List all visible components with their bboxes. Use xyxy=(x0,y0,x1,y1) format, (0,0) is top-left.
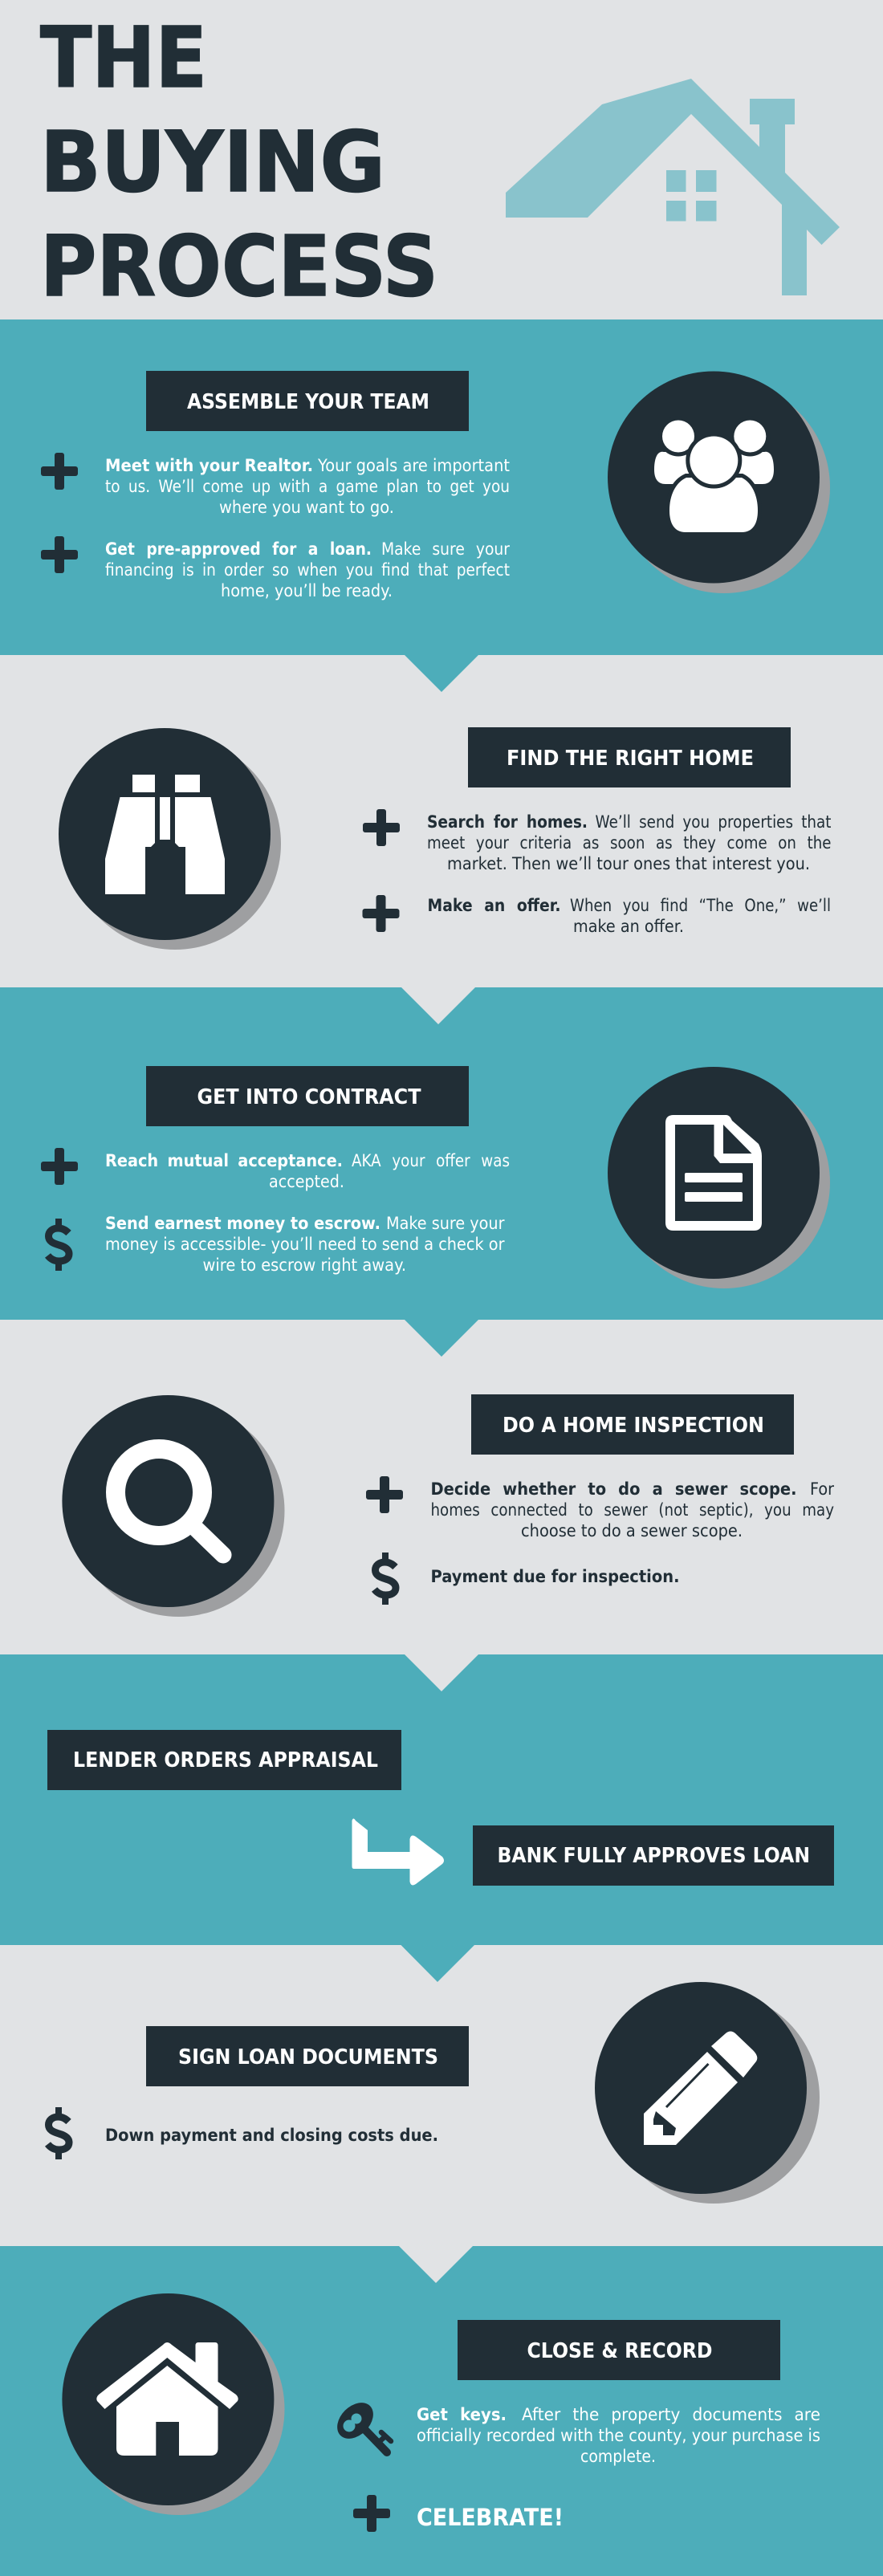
icon: dollar sign xyxy=(48,1219,69,1271)
text block: reach mutual acceptance xyxy=(105,1151,510,1191)
text block: decide on sewer scope xyxy=(430,1479,834,1540)
heading: get into contract: GET INTO CONTRACT xyxy=(197,1085,421,1109)
text block: get pre-approved: Get pre-approved for a loan. xyxy=(105,539,372,559)
heading: lender orders appraisal: LENDER ORDERS APPRAISAL xyxy=(73,1748,378,1772)
title: BUYING xyxy=(40,113,385,211)
text block: decide on sewer scope: homes connected to sewer (not septic), you may xyxy=(430,1500,834,1520)
text block: get keys: officially recorded with the county, your purchase is xyxy=(417,2426,820,2445)
panel: do a home inspection xyxy=(0,1320,883,1654)
heading: get into contract xyxy=(146,1066,469,1126)
arrow: section notch xyxy=(405,1320,478,1357)
heading: assemble your team: ASSEMBLE YOUR TEAM xyxy=(187,390,429,414)
text block: meet with your realtor: where you want to go. xyxy=(219,498,394,517)
panel: find the right home xyxy=(0,655,883,987)
icon: plus xyxy=(363,895,400,932)
heading: lender orders appraisal xyxy=(47,1730,401,1790)
text block: payment due: Payment due for inspection. xyxy=(430,1567,679,1586)
heading: do a home inspection: DO A HOME INSPECTION xyxy=(503,1414,764,1438)
panel: close and record xyxy=(0,2246,883,2576)
text block: meet with your realtor: Your goals are important xyxy=(317,456,510,475)
icon: plus xyxy=(41,536,78,573)
title xyxy=(40,9,438,315)
icon: dollar sign xyxy=(374,1553,396,1605)
text block: search for homes: We’ll send you properties that xyxy=(596,812,832,832)
text block: reach mutual acceptance: accepted. xyxy=(269,1172,344,1191)
icon: plus xyxy=(41,453,78,490)
panel: header xyxy=(0,0,883,319)
text block: meet with your realtor: Meet with your Realtor. xyxy=(105,456,313,475)
text block: send earnest money: money is accessible- you’ll need to send a check or xyxy=(105,1235,505,1254)
icon: pencil in circle xyxy=(595,1982,820,2204)
text block: search for homes: meet your criteria as soon as they come on the xyxy=(427,833,832,853)
text block: make an offer: make an offer. xyxy=(573,917,684,936)
text block: decide on sewer scope: For xyxy=(810,1479,834,1499)
text block: decide on sewer scope: Decide whether to do a sewer scope. xyxy=(430,1479,796,1499)
text block: get keys: complete. xyxy=(580,2447,656,2466)
text block: make an offer: When you find “The One,” we’ll xyxy=(570,896,831,915)
text block: send earnest money: wire to escrow right away. xyxy=(202,1255,406,1275)
title: PROCESS xyxy=(40,218,438,315)
icon: team in circle xyxy=(608,371,830,593)
heading: close and record: CLOSE & RECORD xyxy=(527,2339,713,2363)
heading: do a home inspection xyxy=(471,1394,794,1455)
text block: get keys xyxy=(417,2405,820,2466)
text block: send earnest money: Send earnest money to escrow. xyxy=(105,1214,380,1233)
heading: sign loan documents: SIGN LOAN DOCUMENTS xyxy=(178,2045,438,2069)
icon: document in circle xyxy=(608,1067,830,1288)
heading: sign loan documents xyxy=(146,2026,469,2086)
panel: appraisal and loan approval xyxy=(0,1654,883,1982)
text block: search for homes xyxy=(427,812,832,873)
text block: make an offer xyxy=(427,896,831,936)
panel: get into contract xyxy=(0,987,883,1357)
arrow: section notch xyxy=(401,1945,474,1982)
icon: key xyxy=(330,2395,391,2452)
text block: search for homes: Search for homes. xyxy=(427,812,588,832)
text block: search for homes: market. Then we’ll tour ones that interest you. xyxy=(447,854,810,873)
text block: get pre-approved: financing is in order so when you find that perfect xyxy=(105,560,510,580)
text block: meet with your realtor xyxy=(105,456,510,517)
text block: reach mutual acceptance: Reach mutual acceptance. xyxy=(105,1151,343,1170)
title: THE xyxy=(40,9,207,107)
heading: close and record xyxy=(458,2320,780,2380)
text block: send earnest money xyxy=(105,1214,505,1275)
icon: plus xyxy=(41,1148,78,1185)
arrow: section notch xyxy=(405,655,478,692)
text block: meet with your realtor: to us. We’ll come up with a game plan to get you xyxy=(105,477,510,496)
text block: send earnest money: Make sure your xyxy=(386,1214,505,1233)
text block: get pre-approved xyxy=(105,539,510,600)
text block: reach mutual acceptance: AKA your offer was xyxy=(352,1151,510,1170)
text block: decide on sewer scope: choose to do a sewer scope. xyxy=(521,1521,743,1540)
icon: magnifier in circle xyxy=(62,1395,284,1617)
icon: plus xyxy=(366,1476,403,1513)
text block: get keys: After the property documents are xyxy=(522,2405,820,2424)
text block: down payment: Down payment and closing costs due. xyxy=(105,2126,438,2145)
heading: bank fully approves loan: BANK FULLY APPROVES LOAN xyxy=(498,1844,810,1868)
icon: binoculars in circle xyxy=(59,728,281,950)
text block: celebrate: CELEBRATE! xyxy=(417,2504,564,2531)
icon: house in circle xyxy=(62,2293,284,2515)
text block: get pre-approved: home, you’ll be ready. xyxy=(221,581,393,600)
icon: plus xyxy=(353,2495,390,2532)
arrow: elbow arrow xyxy=(352,1819,444,1885)
icon: dollar sign xyxy=(48,2107,69,2159)
text block: get pre-approved: Make sure your xyxy=(381,539,510,559)
icon: house logo xyxy=(506,79,840,295)
panel: sign loan documents xyxy=(0,1945,883,2246)
icon: plus xyxy=(363,809,400,846)
heading: find the right home: FIND THE RIGHT HOME xyxy=(507,747,754,771)
heading: assemble your team xyxy=(146,371,469,431)
heading: find the right home xyxy=(468,727,791,787)
text block: get keys: Get keys. xyxy=(417,2405,507,2424)
heading: bank fully approves loan xyxy=(473,1825,834,1886)
panel: assemble your team xyxy=(0,319,883,692)
text block: make an offer: Make an offer. xyxy=(427,896,560,915)
